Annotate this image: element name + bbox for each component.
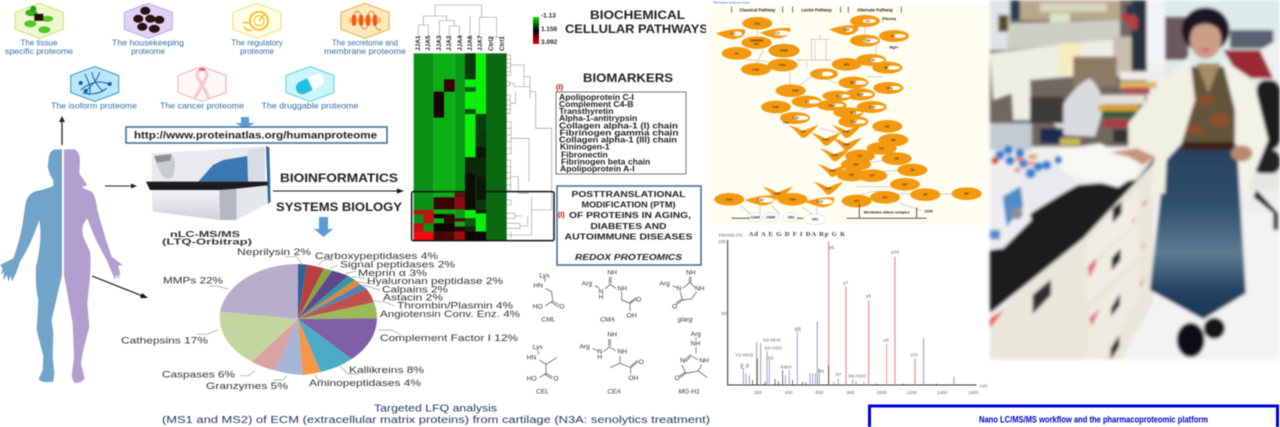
spectrum gray peaks <box>757 322 954 385</box>
spectrum labels: b3 <box>768 355 774 361</box>
panel: PTM redox proteomics <box>557 186 701 265</box>
spectrum labels: y6 <box>829 245 834 251</box>
structure: CEA: H <box>597 354 602 361</box>
pathway node labels: C5* <box>801 130 807 134</box>
spectrum labels: 84b4 <box>780 364 792 370</box>
photo papers <box>1058 143 1138 187</box>
spectrum labels <box>735 245 918 380</box>
structure: glarg: NH <box>686 269 696 276</box>
instrument label: (LTQ-Orbitrap) <box>162 236 252 246</box>
photo floor and chair <box>1123 80 1280 359</box>
heatmap JA6 and JA7 cells <box>465 53 486 177</box>
spectrum labels: y9 <box>883 338 889 344</box>
structure: CML: HO <box>533 304 543 311</box>
pathway node labels: C5b* <box>825 186 833 190</box>
pie chart labels: Meprin α 3% <box>358 268 428 279</box>
mass spectrum <box>718 231 988 395</box>
structure: MG-H1 <box>675 331 709 396</box>
heatmap column labels: Ctrl2 <box>488 36 495 51</box>
spectrum labels: b6 <box>819 368 824 374</box>
pathway node labels: C8 <box>895 157 899 161</box>
pathway node labels: C1s <box>775 31 780 35</box>
spectrum axis labels: 100 <box>718 239 726 244</box>
pathway ellipses <box>714 17 982 207</box>
heatmap column labels: JJA6 <box>467 35 474 51</box>
pathway node labels: C3 <box>805 100 810 104</box>
pathway membrane lines <box>732 203 927 218</box>
pathway header: Lectin Pathway <box>802 7 832 12</box>
structure: MG-H1: NH <box>691 341 700 348</box>
pathway node labels: C6* <box>854 199 860 203</box>
pathway node labels: C5a* <box>774 191 782 195</box>
heading: biochemical cellular pathways <box>565 10 708 36</box>
pathway node labels: C7* <box>882 195 888 199</box>
heatmap column labels: JJA2 <box>446 35 453 51</box>
panel: biomarker list: Apolipoprotein A-I <box>560 164 635 174</box>
heading: biochemical cellular pathways: CELLULAR PATHWAYS <box>565 24 708 36</box>
heatmap colour scale: -1.13 <box>541 12 556 20</box>
structure: CMA: Arg <box>582 281 592 288</box>
structure: CMA: NH <box>607 269 617 276</box>
structure: CEA: NH <box>617 348 627 355</box>
pathway node labels: C3b* <box>857 92 865 96</box>
male half <box>0 149 62 382</box>
structure: MG-H1: Arg <box>691 331 701 338</box>
pathway node labels: C3b* <box>864 39 872 43</box>
panel: PTM redox proteomics: REDOX PROTEOMICS <box>575 252 682 262</box>
pathway node labels: C3a* <box>757 198 765 202</box>
structure: CEL: HO <box>527 375 537 382</box>
heatmap <box>412 53 554 241</box>
pathway crescents <box>780 15 909 128</box>
pie chart labels: Neprilysin 2% <box>237 247 312 258</box>
chemical structures <box>527 269 709 396</box>
panel: PTM redox proteomics: AUTOIMMUNE DISEASES <box>564 232 693 242</box>
spectrum red y-ion peaks <box>829 242 915 385</box>
heading: bioinformatics: BIOINFORMATICS <box>280 173 398 185</box>
proteome labels: The isoform proteome <box>51 102 138 110</box>
pathway node labels: C4b* <box>792 89 800 93</box>
pathway node labels: C4b* <box>773 105 780 109</box>
spectrum labels: E F <box>740 364 750 370</box>
panel: biomarker list: Collagen alpha-1 (I) chain <box>559 120 678 130</box>
pathway node labels: C8 <box>910 168 915 172</box>
instrument label: nLC-MS/MS <box>170 229 240 239</box>
panel: PTM redox proteomics: (I) <box>558 212 565 219</box>
heatmap colour scale <box>533 12 558 46</box>
pathway node labels: C5b* <box>843 142 851 146</box>
pathway node labels: C7* <box>879 146 885 150</box>
pie chart labels: Signal peptidases 2% <box>340 260 456 270</box>
spectrum axis labels: 50 <box>721 311 727 316</box>
spectrum labels: b5 <box>795 327 801 333</box>
panel: biomarker list: Alpha-1-antitrypsin <box>559 113 637 123</box>
pathway node labels: C3b* <box>869 58 876 62</box>
pathway node labels: C5a* <box>823 137 830 141</box>
panel: PTM redox proteomics: DIABETES AND <box>590 221 666 231</box>
instrument label <box>162 229 252 246</box>
pathway node labels: C1r <box>731 32 737 36</box>
caption: targeted LFQ analysis: Targeted LFQ analysis <box>374 404 497 414</box>
pie chart labels: Calpains 2% <box>382 284 449 296</box>
heatmap column labels: JJA7 <box>477 35 484 51</box>
spectrum axis labels: m/z <box>980 383 988 388</box>
heading: systems biology: SYSTEMS BIOLOGY <box>276 202 402 214</box>
structure: CEL: CEL <box>536 389 549 396</box>
heatmap bottom cluster cells <box>414 193 486 240</box>
pathway crescent cut-outs <box>733 19 906 204</box>
photo wall and background right <box>1147 0 1280 78</box>
heatmap JA3 and JA2 cells <box>434 79 455 118</box>
heatmap column labels: JJA3 <box>436 35 443 51</box>
panel: biomarker list: Fibronectin <box>561 150 608 160</box>
pathway node labels: C1q <box>755 21 760 25</box>
icon: isoform proteome <box>71 66 119 102</box>
pathway node labels: C3 <box>866 19 870 23</box>
photo background shelves and clutter <box>990 0 1158 150</box>
spectrum peptide sequence: Ad A E G D F I DA Rp G K <box>749 231 846 238</box>
structure: glarg: NH <box>695 286 705 293</box>
icon: druggable proteome <box>286 66 334 102</box>
heading: biochemical cellular pathways: BIOCHEMICAL <box>590 10 685 22</box>
pie chart labels: Astacin 2% <box>383 292 444 304</box>
pie chart labels: Kallikreins 8% <box>349 365 425 376</box>
pie chart labels: Carboxypeptidases 4% <box>315 251 439 262</box>
pathway header: Classical Pathway <box>739 7 776 12</box>
heading: biomarkers: BIOMARKERS <box>583 73 673 85</box>
arrow: blue down <box>314 217 333 237</box>
pathway node labels: BF <box>891 34 895 38</box>
spectrum axis labels: 400 <box>785 390 793 395</box>
structure: CMA: OH <box>627 313 637 320</box>
pathway node labels: C4BP <box>780 49 788 53</box>
proteome labels: The tissue <box>21 38 58 48</box>
structure: CMA: O <box>636 297 641 304</box>
spectrum axis labels: 600 <box>815 390 824 395</box>
spectrum axis labels <box>718 232 988 395</box>
dendrogram: columns <box>418 5 502 38</box>
proteome labels: proteome <box>240 47 274 56</box>
pathway receptor labels: CR1 <box>812 217 818 221</box>
photo bottles and centrifuge <box>990 145 1078 250</box>
caption: targeted LFQ analysis <box>162 404 710 426</box>
spectrum labels: b3-NH3 <box>763 338 781 344</box>
structure: CEA: NH <box>607 332 617 339</box>
pathway header <box>713 1 901 13</box>
pathway node labels: C7* <box>870 174 876 178</box>
arrow: person to proteome <box>59 116 65 145</box>
spectrum labels: b7 <box>836 372 842 378</box>
pie chart labels: Granzymes 5% <box>206 381 289 392</box>
pathway node labels: C3b* <box>869 105 877 109</box>
structure: CML: O <box>559 304 565 311</box>
pathway node labels: BFa <box>887 86 893 90</box>
pathway node labels: C3a <box>783 120 789 124</box>
structure: MG-H1: O <box>675 375 680 382</box>
heatmap colour scale: 3.092 <box>541 39 558 46</box>
structure: glarg <box>659 269 705 324</box>
bottom cluster outline box <box>412 192 554 241</box>
proteome labels: specific proteome <box>5 47 74 56</box>
pathway node labels: C7* <box>857 154 863 158</box>
panel: biomarker list: Apolipoprotein C-I <box>559 92 634 102</box>
photo scientist <box>1110 7 1268 357</box>
pathway header: Path Designer Complement System <box>713 1 750 4</box>
pathway: complement system <box>706 1 991 225</box>
spectrum labels: b3-H2O <box>765 345 782 351</box>
human figure <box>0 149 123 383</box>
photo: scientist in laboratory <box>990 0 1280 360</box>
pathway node labels: C3a* <box>836 94 843 98</box>
pathway node labels: C6* <box>853 162 859 166</box>
panel: biomarker list: Kininogen-1 <box>560 141 610 151</box>
spectrum labels: y7 <box>843 280 848 286</box>
spectrum labels: Y2-NH3 <box>735 353 753 359</box>
proteome labels: membrane proteome <box>324 47 407 56</box>
structure: MG-H1: NH <box>699 358 709 365</box>
dendrogram: rows <box>507 55 552 238</box>
structure: CEA: N <box>597 348 602 355</box>
pathway node labels <box>726 17 970 204</box>
pathway node labels: P <box>821 72 823 76</box>
panel: nano LC/MS/MS workflow caption: Nano LC/MS/MS workflow and the pharmacoproteomic platform <box>979 414 1208 424</box>
spectrum axis labels: 800 <box>847 390 855 395</box>
pathway node labels: C9* <box>964 192 970 196</box>
structure: CML: Lys <box>539 272 550 279</box>
panel: biomarker list <box>556 92 686 174</box>
proteome labels <box>5 38 407 110</box>
pie chart labels: Angiotensin Conv. Enz. 4% <box>380 309 521 320</box>
pathway teardrops <box>716 25 859 207</box>
spectrum axis labels: 1600 <box>968 390 979 395</box>
pathway node labels: C3b* <box>793 116 800 120</box>
panel: biomarker list: Transthyretin <box>559 106 613 116</box>
pathway receptors <box>748 213 826 225</box>
pathway node labels: C5b* <box>843 130 851 134</box>
pathway receptor labels: C3AR <box>751 215 760 219</box>
spectrum blue b-ion peaks <box>743 332 864 385</box>
pathway node labels: C3b* <box>829 103 837 107</box>
pathway node labels: BFb <box>850 111 856 115</box>
spectrum axes <box>728 240 977 385</box>
icon: secretome and membrane proteome <box>341 3 389 38</box>
pathway node labels: C8* <box>891 138 897 142</box>
annotation: I: (I) <box>556 82 564 92</box>
pathway receptor labels: CD59 <box>924 210 933 214</box>
panel: biomarker list: Fibrinogen beta chain <box>561 157 650 167</box>
pie chart labels: Thrombin/Plasmin 4% <box>397 300 514 312</box>
female half <box>64 149 123 383</box>
pathway node labels: C6* <box>885 124 891 128</box>
structure: CML: CML <box>541 317 556 324</box>
spectrum axis labels: 1200 <box>906 390 917 395</box>
arrow: from atlas icons to url <box>235 117 255 128</box>
heatmap column labels: JJA5 <box>425 35 432 51</box>
structure: CML <box>533 272 565 324</box>
structure: CEA: O <box>639 359 644 366</box>
pathway receptor labels: CR3 <box>788 215 794 219</box>
pathway node labels: Mg2+ <box>890 46 898 50</box>
spectrum axis labels: 1400 <box>937 390 948 395</box>
pathway node labels: C3b* <box>851 120 858 124</box>
structure: glarg: Arg <box>659 281 670 288</box>
structure: CEL: HN <box>527 354 536 361</box>
pie chart labels: Aminopeptidases 4% <box>309 378 422 389</box>
pathway node labels: C4 <box>735 51 739 55</box>
caption: targeted LFQ analysis: (MS1 and MS2) of ECM (extracellular matrix proteins) from cartilage (N3A: senolytics treatment) <box>162 415 710 426</box>
spectrum labels: b8-H2O <box>849 374 866 380</box>
structure: MG-H1: N <box>680 358 685 365</box>
spectrum axis labels: 200 <box>754 390 762 395</box>
pathway header: Alternate Pathway <box>857 7 894 12</box>
structure: glarg: glarg <box>678 317 693 324</box>
pathway node labels: C5b* <box>829 169 837 173</box>
heatmap column labels: Ctrl1 <box>499 36 506 51</box>
pie chart labels: MMPs 22% <box>163 276 224 286</box>
structure: CEA: OH <box>628 375 638 382</box>
proteome labels: The housekeeping <box>112 38 184 48</box>
pathway node labels: C5b* <box>832 153 839 157</box>
spectrum dark noise peaks <box>753 358 937 385</box>
photo bench cabinets <box>990 157 1155 360</box>
icon: tissue specific proteome <box>15 3 63 38</box>
pie chart labels <box>121 247 521 392</box>
pathway node labels: C9 <box>923 193 928 197</box>
proteome labels: The cancer proteome <box>160 102 245 110</box>
pathway receptor labels: Membrane attack complex <box>864 211 910 215</box>
structure: CMA: N <box>599 288 604 295</box>
pie chart: ECM proteases <box>197 257 402 380</box>
heatmap colour scale: 1.156 <box>541 26 558 33</box>
structure: CMA: NH <box>617 286 627 293</box>
spectrum axis labels: 1000 <box>876 390 887 395</box>
panel: biomarker list: Complement C4-B <box>559 99 634 109</box>
panel: nano LC/MS/MS workflow caption <box>870 406 1278 427</box>
arrow: to heatmap <box>273 188 404 194</box>
panel: biomarker list: Collagen alpha-1 (III) chain <box>559 134 677 144</box>
heatmap column labels: JJA1 <box>415 35 422 51</box>
pathway node labels: C6* <box>849 173 855 177</box>
pathway node labels: C4a* <box>753 67 760 71</box>
pathway node labels: G1* <box>754 42 760 46</box>
spectrum labels: y11 <box>910 352 918 358</box>
heatmap column labels: JJA4 <box>457 35 464 51</box>
pathway node labels: C4a* <box>726 197 733 201</box>
icon: regulatory proteome <box>233 3 281 38</box>
pathway node labels: C9* <box>902 182 908 186</box>
proteome labels: The druggable proteome <box>262 102 359 110</box>
pie chart labels: Cathepsins 17% <box>121 336 209 346</box>
pathway node labels: C4b* <box>779 63 787 67</box>
structure: CEL: Lys <box>533 344 543 351</box>
structure: glarg: O <box>672 303 677 310</box>
structure: CEL <box>527 344 559 396</box>
pie chart labels: Hyaluronan peptidase 2% <box>367 276 504 287</box>
pathway node labels: C4b* <box>789 197 797 201</box>
arrow: person to instrument <box>105 184 137 188</box>
pathway node labels: C3a* <box>817 200 824 204</box>
instrument: nLC-MS/MS LTQ-Orbitrap <box>146 146 271 220</box>
panel: PTM redox proteomics: OF PROTEINS IN AGING, <box>569 210 691 220</box>
panel: PTM redox proteomics: MODIFICATION (PTM) <box>582 200 676 210</box>
heatmap column labels <box>415 35 506 51</box>
pathway connections <box>737 27 953 217</box>
structure: CEA <box>579 332 644 396</box>
url box <box>126 127 387 143</box>
spectrum labels: y10 <box>891 249 899 255</box>
proteome labels: The regulatory <box>231 38 283 48</box>
pathway node labels: (Plasma) <box>882 17 896 21</box>
proteome labels: The secretome and <box>332 38 398 48</box>
panel: biomarker list: Fibrinogen gamma chain <box>560 127 678 137</box>
pie chart labels: Complement Factor I 12% <box>380 333 519 344</box>
structure: CEL: O <box>553 375 559 382</box>
pathway node labels: BF <box>885 66 889 70</box>
pathway background <box>706 5 991 225</box>
pathway receptor labels: C5AR <box>766 215 776 219</box>
pathway receptor labels <box>751 210 933 221</box>
structure: MG-H1: MG-H1 <box>678 389 700 396</box>
pie chart labels: Caspases 6% <box>162 370 236 380</box>
pathway node labels: C3a* <box>843 28 851 32</box>
structure: CMA: H <box>599 294 604 301</box>
spectrum axis labels: Intensity (%) <box>719 232 743 237</box>
spectrum labels: y8 <box>866 293 871 299</box>
structure: CEA: Arg <box>579 343 590 350</box>
pathway node labels: BFb <box>850 81 856 85</box>
structure: CEA: CEA <box>607 389 622 396</box>
pathway node labels: HF1 <box>844 62 850 66</box>
panel: PTM redox proteomics: POSTTRANSLATIONAL <box>572 189 686 199</box>
structure: CML: HN <box>533 283 543 290</box>
structure: CMA: CMA <box>600 317 615 324</box>
structure: CMA <box>582 269 641 324</box>
panel: proteome categories <box>5 3 407 110</box>
arrow: person to pie <box>92 276 148 298</box>
structure: glarg: N <box>677 286 682 293</box>
icon: cancer proteome <box>178 66 226 102</box>
icon: housekeeping proteome <box>124 3 172 38</box>
pathway node labels: SERPING <box>750 38 764 42</box>
proteome labels: proteome <box>131 47 165 56</box>
url box: http://www.proteinatlas.org/humanproteome <box>134 130 378 142</box>
pathway chevrons <box>763 125 862 200</box>
